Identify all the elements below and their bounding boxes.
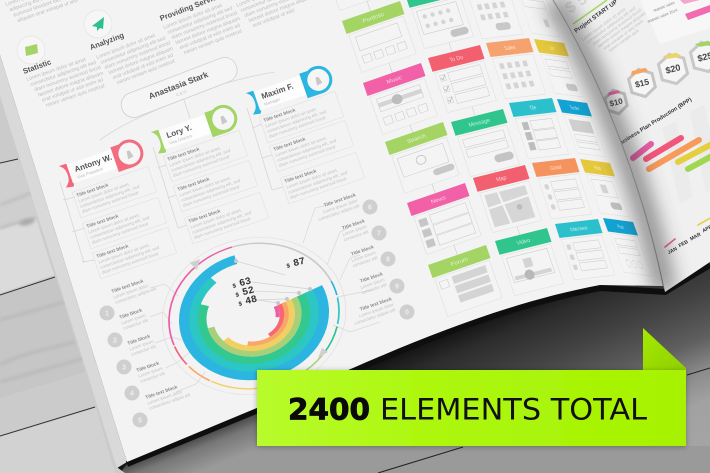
left number badges: 3 bbox=[122, 364, 126, 372]
wireframe: News bbox=[407, 183, 486, 265]
title text blocks: Lory column bbox=[163, 130, 269, 244]
wireframe: yellow header card bbox=[534, 39, 584, 97]
title text blocks: Lory column: Title text block bbox=[188, 208, 222, 225]
title text blocks: Maxim column bbox=[259, 91, 365, 204]
gantt chart columns bbox=[662, 105, 710, 204]
title text blocks: Lory column: diam nonummy euismod tincid bbox=[182, 184, 240, 208]
right labels: Title block bbox=[359, 271, 384, 285]
text block: statistic: Lorem ipsum dolor sit amet bbox=[26, 57, 87, 83]
right number badges: 7 bbox=[377, 230, 381, 238]
hexagon: $15: $15 bbox=[634, 76, 650, 90]
title text blocks: Maxim column: diam nonummy euismod tincid bbox=[278, 144, 336, 168]
title text blocks: Antony column: diam nonummy euismod tincid bbox=[81, 190, 139, 214]
icon: analyzing paper plane bbox=[84, 10, 112, 38]
name card: Lory Y.: Lory Y. bbox=[165, 123, 193, 140]
left labels: consectetur adipisi elit bbox=[148, 392, 192, 411]
wireframe: Search: Search bbox=[406, 134, 427, 145]
title text blocks: Antony column: diam nonummy euismod tincid bbox=[91, 221, 149, 245]
left labels bbox=[111, 275, 192, 411]
title text blocks: Lory column: consectetuer adipiscing elit, sed bbox=[191, 210, 252, 235]
text block: providing services bbox=[163, 4, 242, 54]
right labels: Title block bbox=[341, 218, 366, 232]
right number badges: 9 bbox=[395, 284, 399, 290]
wireframe: Video: Video bbox=[516, 238, 531, 247]
icon: statistic briefcase bbox=[17, 36, 45, 64]
month axis labels: FEB bbox=[678, 239, 690, 249]
left number badges: 2 bbox=[113, 338, 117, 344]
wireframe: Gmail bbox=[532, 158, 593, 219]
hexagon: $15 bbox=[627, 67, 657, 99]
month axis labels: JAN bbox=[667, 246, 679, 256]
title text blocks: Maxim column: Lorem ipsum dolor sit amet, bbox=[265, 106, 317, 129]
org chart connectors bbox=[60, 72, 283, 263]
radial chart arrows bbox=[190, 259, 328, 358]
left number badges: 4 bbox=[130, 390, 134, 398]
wireframe: Music: Music bbox=[386, 75, 403, 86]
text block: analyzing: consectetur adipiscing elit sed bbox=[100, 35, 167, 66]
gantt milestone lines bbox=[665, 217, 710, 247]
right labels: consectur elit bbox=[343, 229, 370, 242]
hexagon: $20 bbox=[657, 51, 689, 87]
title text blocks: Lory column: Lorem ipsum dolor sit amet, bbox=[190, 207, 242, 230]
value: 87: $ 87 bbox=[285, 257, 307, 272]
background: light wood planks on the left bbox=[0, 90, 125, 473]
name card: Antony W. bbox=[59, 140, 144, 188]
month axis labels: MAR bbox=[689, 232, 702, 242]
text block: top right of left page: erat volutpat ut wisi bbox=[252, 8, 296, 29]
wireframe: Interview: Interview bbox=[569, 225, 589, 234]
wireframe: second yellow header card: Help bbox=[593, 165, 602, 171]
right labels: Lorem ipsum dolor bbox=[358, 302, 395, 318]
title text blocks: Antony column: consectetuer adipiscing elit, sed bbox=[89, 215, 150, 240]
gantt chart bars bbox=[633, 138, 710, 169]
wireframe: Tender: Tender bbox=[569, 104, 581, 111]
text block: project start up: diam nonummy euismod tincid bbox=[591, 7, 643, 46]
text block: providing services: minim veniam quis nostrud bbox=[183, 28, 243, 56]
right labels: Title text block bbox=[359, 296, 393, 313]
title text blocks: Antony column: Lorem ipsum dolor sit amet, bbox=[78, 181, 130, 204]
right labels: consectetur adipisi elit bbox=[318, 203, 361, 222]
text block: providing services: consectetur adipiscing elit sed bbox=[167, 5, 234, 36]
left labels: Title block bbox=[136, 360, 160, 374]
month axis labels bbox=[667, 224, 710, 256]
title text blocks: Antony column: Lorem ipsum dolor sit amet, bbox=[88, 212, 140, 235]
title text blocks: Antony column: Title text block bbox=[76, 182, 110, 199]
name card: Maxim F. bbox=[246, 66, 332, 115]
title text blocks: Maxim column: Title text block bbox=[263, 107, 297, 124]
text block: providing services: Lorem ipsum dolor sit amet bbox=[163, 3, 224, 31]
green rule bbox=[573, 0, 607, 24]
wireframe: Music bbox=[363, 63, 438, 134]
right labels: Lorem ipsum bbox=[342, 224, 368, 237]
text block: analyzing: Lorem ipsum dolor sit amet bbox=[96, 33, 157, 61]
title text blocks: Maxim column: consectetuer adipiscing elit, sed bbox=[276, 138, 337, 163]
right labels: Title text block bbox=[323, 192, 357, 209]
banner: 2400 elements total bbox=[257, 370, 686, 446]
text block: statistic: diam nonummy euismod tincid bbox=[34, 65, 102, 93]
left labels: Title text block bbox=[145, 384, 179, 401]
banner text: ELEMENTS TOTAL bbox=[380, 392, 647, 426]
title text blocks: Maxim column: diam nonummy euismod tincid bbox=[268, 115, 326, 139]
title text blocks: Lory column: Lorem ipsum dolor sit amet, bbox=[179, 175, 231, 198]
right labels: Lorem ipsum bbox=[351, 250, 377, 263]
left labels: Lorem ipsum dolor bbox=[147, 389, 183, 406]
title text blocks: Lory column: Title text block bbox=[177, 176, 211, 193]
wireframe: Sales: Sales bbox=[504, 44, 517, 52]
donut ring segments bbox=[179, 255, 329, 380]
radial chart connector lines bbox=[150, 205, 380, 392]
right labels: Lorem ipsum bbox=[360, 277, 386, 290]
hexagon: $25 bbox=[689, 39, 710, 75]
wireframe: Message: Message bbox=[468, 118, 491, 129]
text block: statistic: laoreet dolore magna aliquam bbox=[37, 71, 104, 99]
text block: analyzing: erat volutpat ut wisi enim ad bbox=[112, 52, 174, 81]
title text blocks: Maxim column: Lorem ipsum dolor sit amet, bbox=[275, 135, 327, 158]
text block: analyzing: laoreet dolore magna aliquam bbox=[108, 46, 174, 76]
text block: analyzing bbox=[96, 34, 175, 84]
text block: providing services: laoreet dolore magna aliquam bbox=[175, 16, 241, 46]
wireframe: To Do: To Do bbox=[449, 55, 464, 64]
title text blocks: Antony column: consectetuer adipiscing elit, sed bbox=[79, 184, 140, 209]
heading: Project START UP: Project START UP bbox=[574, 0, 619, 35]
value leader lines bbox=[236, 261, 310, 303]
segmented outer arcs bbox=[168, 242, 340, 390]
wireframe: Map: Map bbox=[496, 175, 508, 184]
wireframe: Sales bbox=[486, 38, 547, 99]
wireframe: Post: Post bbox=[616, 224, 625, 230]
wireframe column 1 top card bbox=[336, 0, 370, 11]
right labels: Title block bbox=[350, 244, 375, 258]
text block: statistic bbox=[26, 58, 104, 107]
wireframe: Video bbox=[495, 228, 565, 296]
wireframe column 2 top card bbox=[405, 0, 478, 58]
title text blocks: Lory column: diam nonummy euismod tincid bbox=[193, 216, 251, 240]
panel: top right stats: statistic sales 2014 bbox=[647, 8, 678, 24]
title text blocks: Lory column: consectetuer adipiscing elit, sed bbox=[170, 148, 231, 173]
name card: Lory Y.: Vice Director bbox=[168, 133, 193, 146]
text block: project start up: consectetur adipiscing elit sed bbox=[586, 5, 637, 44]
left labels: consectur elit bbox=[139, 370, 166, 384]
text block: providing services: erat volutpat ut wisi enim ad bbox=[179, 22, 241, 51]
name card: Antony W.: Vice President bbox=[76, 166, 104, 180]
right number badges: 0 bbox=[405, 310, 409, 316]
left number badges bbox=[100, 306, 148, 428]
magazine cover side edge bbox=[0, 55, 127, 468]
left labels: Lorem ipsum bbox=[138, 366, 164, 379]
wireframe column 3 top card bbox=[469, 0, 523, 39]
org chart root: Anastasia Stark: Anastasia Stark bbox=[147, 69, 210, 101]
wireframe: Interview bbox=[555, 219, 616, 280]
left labels: Title block bbox=[127, 333, 151, 347]
hexagon: $20: $20 bbox=[664, 62, 682, 76]
panel: top right stats bbox=[640, 0, 710, 44]
outer dashed ring bbox=[162, 237, 346, 395]
wireframe: Search bbox=[385, 122, 460, 194]
title text blocks: Maxim column: diam nonummy euismod tincid bbox=[289, 176, 347, 200]
right number badges: 8 bbox=[386, 256, 390, 264]
right number badges: 6 bbox=[368, 204, 372, 212]
left number badges: 5 bbox=[138, 418, 142, 424]
wireframe: Post bbox=[603, 218, 653, 276]
wireframe: Forum bbox=[428, 245, 504, 317]
title text blocks: Maxim column: Title text block bbox=[273, 136, 307, 153]
wireframe: Map bbox=[473, 165, 546, 242]
title text blocks: Antony column: diam nonummy euismod tincid bbox=[101, 251, 159, 275]
wireframe: Message bbox=[451, 109, 524, 186]
name card: Maxim F.: Manager bbox=[263, 96, 281, 107]
wireframe: To Do bbox=[428, 45, 501, 122]
name card: Lory Y. bbox=[151, 104, 238, 154]
wireframe: second yellow header card bbox=[580, 159, 630, 217]
background: lighter floor below the banner and at bottom left corner bbox=[120, 411, 710, 473]
wireframe: Forum: Forum bbox=[450, 257, 469, 268]
text block: top right of left page bbox=[236, 0, 306, 27]
right labels: consectur elit bbox=[352, 255, 379, 268]
right page sheet bbox=[553, 0, 710, 292]
left number badges: 1 bbox=[105, 310, 109, 318]
left labels: Lorem ipsum bbox=[121, 313, 147, 326]
value: 48: $ 48 bbox=[237, 295, 259, 310]
left labels: Lorem ipsum dolor bbox=[113, 283, 149, 300]
title text blocks: Maxim column: consectetuer adipiscing elit, sed bbox=[266, 109, 327, 134]
title text blocks: Antony column: Title text block bbox=[86, 213, 120, 230]
text block: project start up: erat volutpat ut wisi enim bbox=[602, 18, 644, 51]
heading: Business Plan Production (BPP): Business Plan Production (BPP) bbox=[617, 97, 693, 148]
title text blocks: Lory column: consectetuer adipiscing elit, sed bbox=[180, 178, 241, 203]
left labels: consectur elit bbox=[130, 343, 157, 357]
text block: analyzing: minim veniam quis nostrud bbox=[116, 58, 176, 86]
left labels: Title text block bbox=[111, 278, 145, 295]
right labels: Lorem ipsum dolor bbox=[322, 198, 359, 214]
wireframe column 4 top card bbox=[518, 0, 560, 37]
wireframe: Portfolio: Portfolio bbox=[362, 12, 385, 25]
radial chart bbox=[162, 237, 346, 395]
right number badges bbox=[362, 200, 414, 320]
magazine page stack dark edge bbox=[127, 265, 710, 464]
hexagon: $10: $10 bbox=[609, 96, 624, 108]
title text blocks: Antony column bbox=[72, 166, 177, 279]
wireframe: Tile: Tile bbox=[529, 105, 538, 112]
title text blocks: Lory column: Title text block bbox=[167, 146, 201, 163]
right page content bbox=[563, 0, 710, 256]
name card: Maxim F.: Maxim F. bbox=[260, 82, 295, 101]
left labels: Lorem ipsum bbox=[129, 339, 155, 352]
org chart root: Anastasia Stark bbox=[120, 57, 238, 118]
left labels: Title block bbox=[119, 307, 143, 321]
text block: providing services: diam nonummy euismod tincid bbox=[171, 10, 238, 41]
title text blocks: Antony column: Lorem ipsum dolor sit amet, bbox=[98, 242, 150, 265]
text block: project start up: Lorem ipsum dolor sit amet bbox=[581, 6, 627, 42]
title text blocks: Antony column: Title text block bbox=[96, 243, 130, 260]
title text blocks: Lory column: diam nonummy euismod tincid bbox=[172, 154, 230, 178]
banner fold triangle bbox=[643, 328, 686, 372]
wireframe: Portfolio bbox=[342, 1, 416, 73]
wireframe: Gmail: Gmail bbox=[549, 164, 563, 172]
heading: Analyzing: Analyzing bbox=[88, 30, 126, 52]
text block: project start up bbox=[581, 0, 653, 62]
org chart root: Anastasia Stark: C.E.O bbox=[175, 89, 187, 97]
wood plank lines, bottom right bbox=[378, 368, 710, 473]
hexagon: $10 bbox=[603, 88, 629, 116]
right labels bbox=[314, 192, 397, 326]
value markers bbox=[234, 259, 312, 305]
wireframe: Tile bbox=[509, 98, 570, 159]
wireframe: Tender bbox=[557, 99, 607, 157]
title text blocks: Antony column: consectetuer adipiscing elit, sed bbox=[99, 245, 160, 270]
title text blocks: Lory column: Lorem ipsum dolor sit amet, bbox=[169, 145, 221, 168]
value: 52: $ 52 bbox=[234, 286, 256, 301]
title text blocks: Maxim column: Title text block bbox=[284, 168, 318, 185]
left labels: consectetur adipisi elit bbox=[114, 286, 158, 305]
text block: statistic: minim veniam quis nostrud bbox=[45, 83, 106, 109]
title text blocks: Maxim column: Lorem ipsum dolor sit amet, bbox=[286, 167, 338, 190]
title text blocks: Maxim column: consectetuer adipiscing elit, sed bbox=[287, 170, 348, 195]
text block: analyzing: diam nonummy euismod tincid bbox=[104, 40, 171, 71]
spine fold shadow bbox=[553, 0, 665, 292]
text block: project start up: minim veniam quis bbox=[607, 27, 640, 53]
value: 63: $ 63 bbox=[231, 277, 253, 292]
right labels: consectur elit bbox=[361, 282, 388, 295]
banner text: 2400 bbox=[288, 392, 370, 426]
wireframe: yellow header card: List bbox=[548, 45, 555, 51]
text block: project start up: laoreet dolore magna aliquam bbox=[597, 10, 647, 49]
left labels: consectur elit bbox=[122, 317, 149, 331]
wireframe: News: News bbox=[430, 195, 447, 206]
heading: Statistic: Statistic bbox=[22, 57, 52, 76]
text block: statistic: erat volutpat ut wisi enim ad bbox=[41, 77, 104, 104]
text block: statistic: consectetur adipiscing elit sed bbox=[30, 60, 97, 88]
panel: top right stats: statistic sales bbox=[653, 1, 675, 13]
right labels: consectetur adipisi elit bbox=[354, 307, 397, 326]
name card: Antony W.: Antony W. bbox=[73, 153, 113, 174]
